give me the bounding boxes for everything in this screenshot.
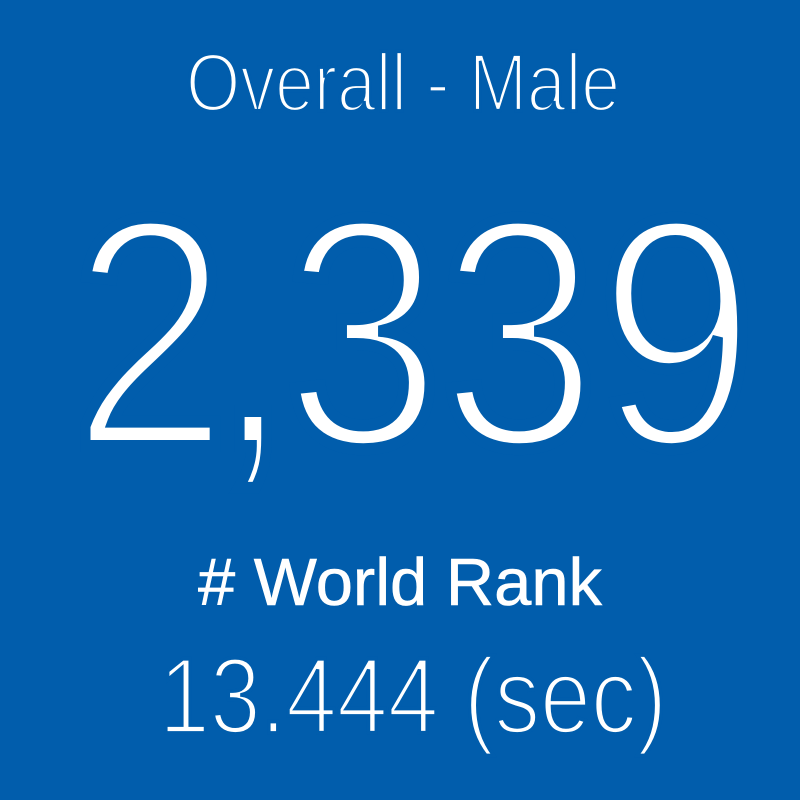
main value: 2,339: [71, 150, 756, 515]
title: Overall - Male: [186, 38, 620, 128]
metric label: # World Rank: [198, 545, 602, 620]
time value: 13.444 (sec): [159, 635, 667, 756]
